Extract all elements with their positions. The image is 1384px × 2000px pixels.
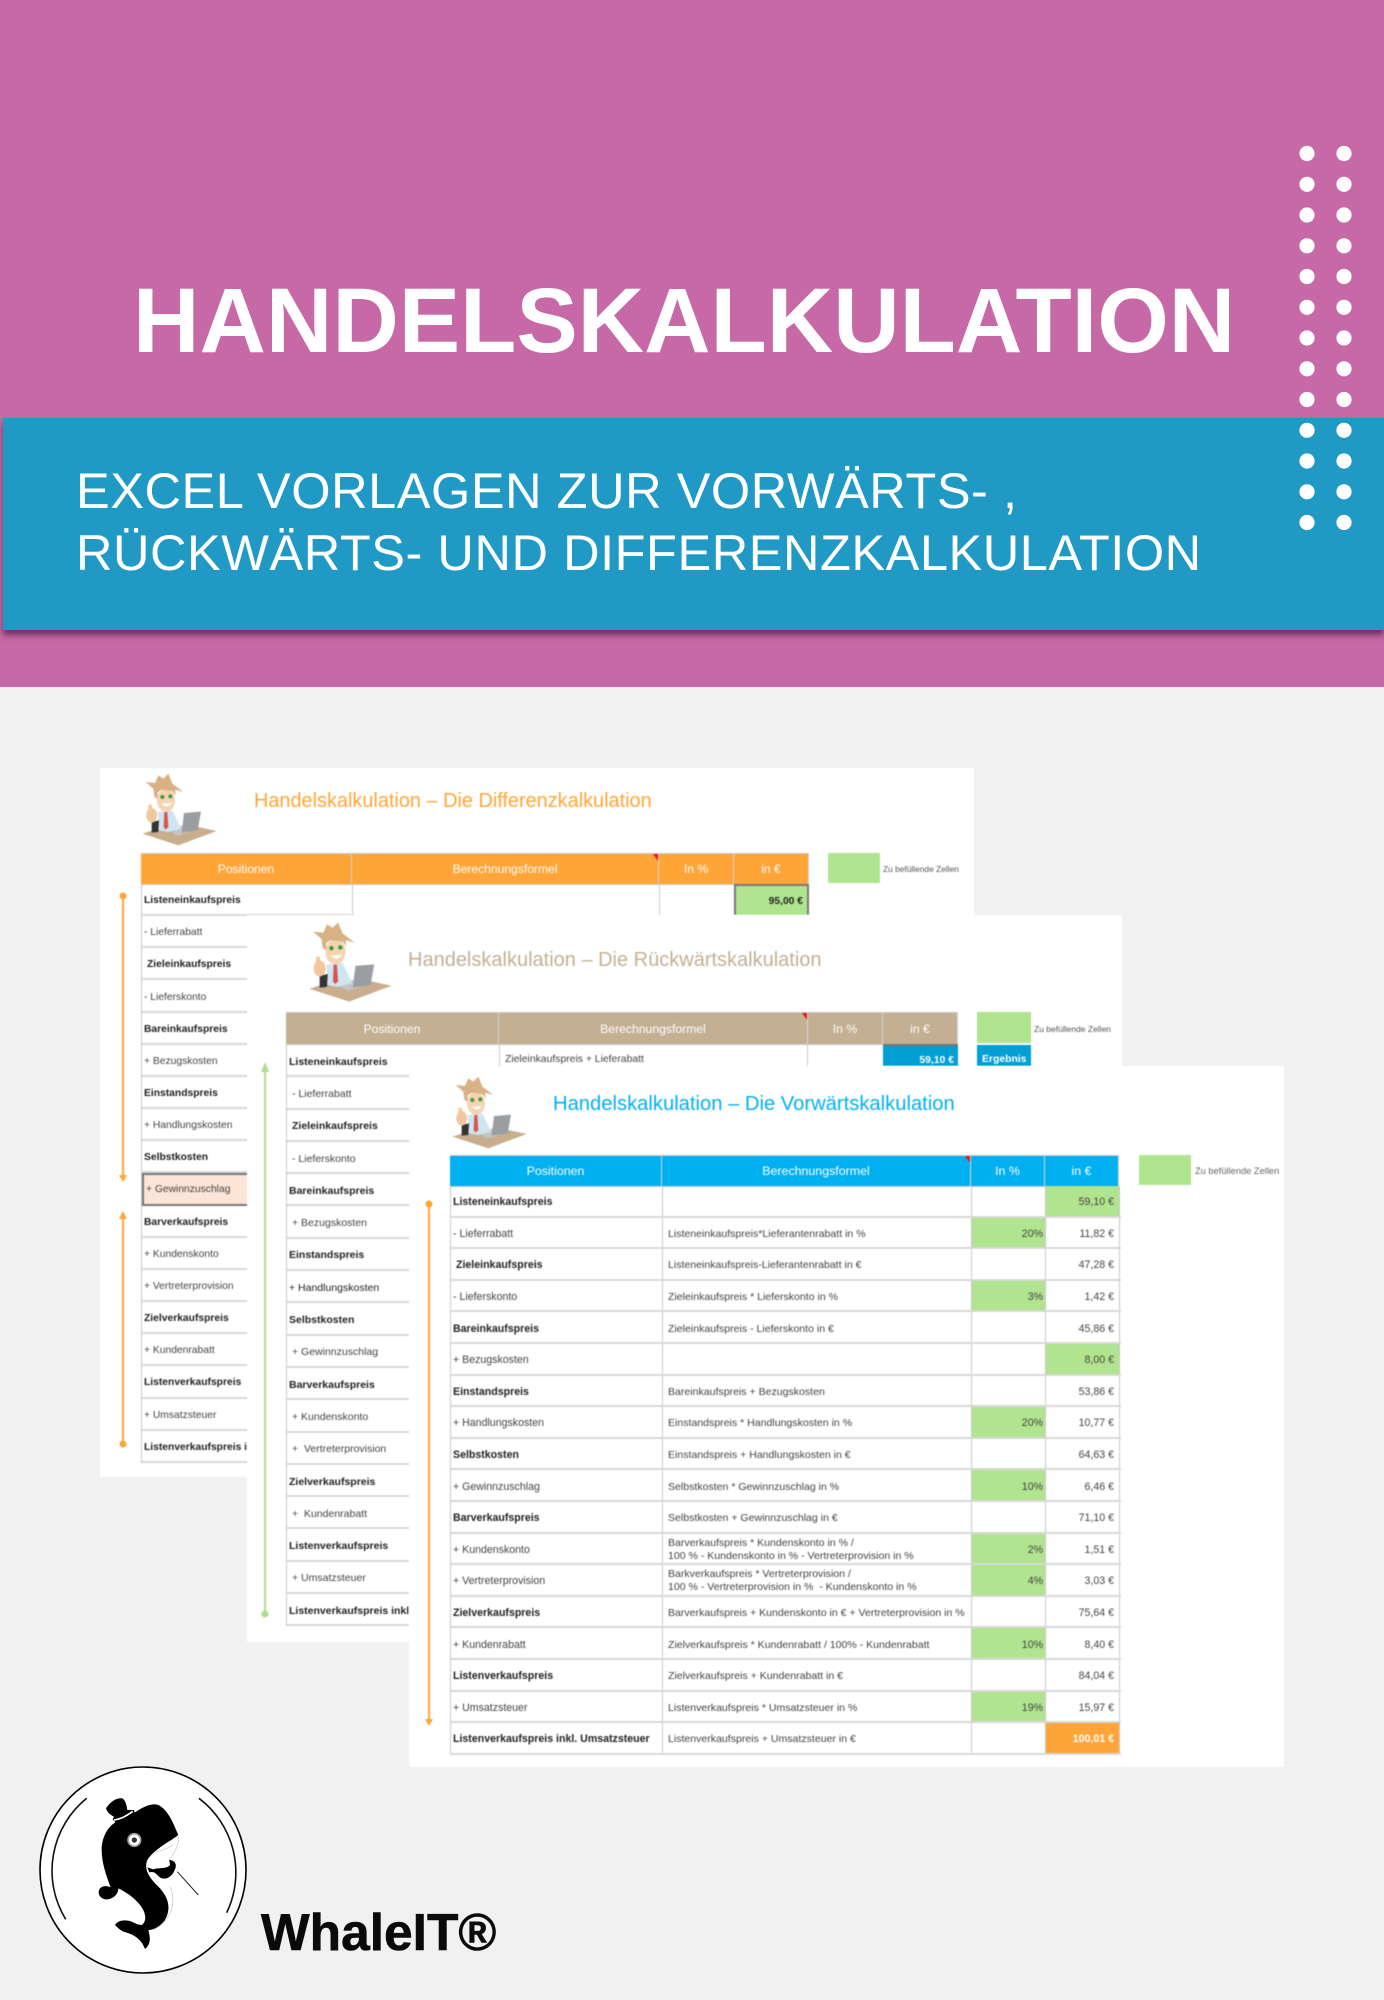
first row formula text	[499, 1045, 808, 1066]
column of position labels: + Handlungskosten	[144, 1120, 232, 1131]
row Bareinkaufspreis: Bareinkaufspreis	[453, 1323, 539, 1335]
column of position labels: Einstandspreis	[289, 1249, 364, 1261]
arrow: orange up	[118, 1210, 128, 1448]
row Bareinkaufspreis: Zieleinkaufspreis - Lieferskonto in €	[668, 1323, 834, 1335]
column of position labels: + Vertreterprovision	[292, 1443, 386, 1455]
row Lieferskonto: 3%	[1028, 1291, 1043, 1303]
row Umsatzsteuer: Listenverkaufspreis * Umsatzsteuer in %	[668, 1702, 857, 1714]
row Einstandspreis	[451, 1376, 1121, 1407]
column of position labels: + Kundenrabatt	[144, 1345, 215, 1356]
legend label: Zu befüllende Zellen	[883, 864, 959, 874]
column of position labels: Bareinkaufspreis	[289, 1185, 374, 1197]
row Gewinnzuschlag: + Gewinnzuschlag	[453, 1481, 540, 1493]
panel: Rückwärtskalkulation	[247, 915, 1122, 1642]
column of position labels	[286, 1045, 501, 1626]
first row formula column line	[659, 884, 660, 915]
row Zieleinkaufspreis	[451, 1249, 1121, 1281]
column of position labels: Bareinkaufspreis	[144, 1024, 228, 1035]
row Umsatzsteuer	[451, 1692, 1121, 1723]
row Vertreterprovision: 3,03 €	[1085, 1575, 1114, 1587]
column of position labels: + Kundenrabatt	[292, 1508, 367, 1520]
row Listenverkaufspreis	[451, 1660, 1121, 1692]
row Listeneinkaufspreis: 59,10 €	[1079, 1196, 1114, 1208]
row Bareinkaufspreis	[451, 1312, 1121, 1344]
table header	[286, 1012, 958, 1045]
row Zielverkaufspreis	[451, 1597, 1121, 1628]
arrow: orange down	[424, 1200, 434, 1726]
column of position labels: + Gewinnzuschlag	[146, 1184, 230, 1195]
legend: cells to fill	[976, 1011, 1112, 1044]
table header: In %	[684, 862, 708, 876]
legend: cells to fill	[1138, 1154, 1280, 1186]
row Kundenrabatt: Zielverkaufspreis * Kundenrabatt / 100% - Kundenrabatt	[668, 1639, 929, 1651]
row Umsatzsteuer: + Umsatzsteuer	[453, 1702, 527, 1714]
column of position labels: + Bezugskosten	[144, 1056, 218, 1067]
column of position labels: + Umsatzsteuer	[144, 1410, 216, 1421]
row Handlungskosten	[451, 1407, 1121, 1439]
logo: whale in circle	[39, 1766, 247, 1974]
row Selbstkosten: Selbstkosten	[453, 1449, 519, 1461]
row Zielverkaufspreis: Zielverkaufspreis	[453, 1607, 540, 1619]
table header: in €	[910, 1022, 930, 1036]
column of position labels: Listenverkaufspreis	[144, 1377, 241, 1388]
panel: Vorwärtskalkulation	[409, 1066, 1284, 1767]
icon: businessman at laptop	[309, 922, 392, 1002]
column of position labels: + Kundenskonto	[144, 1249, 219, 1260]
table header	[450, 1155, 1119, 1187]
column of position labels: - Lieferskonto	[144, 992, 206, 1003]
row Kundenrabatt	[451, 1628, 1121, 1660]
row Bezugskosten	[451, 1344, 1121, 1376]
column of position labels: Listenverkaufspreis inkl. Umsatzsteuer	[289, 1605, 484, 1617]
column of position labels: Barverkaufspreis	[289, 1379, 375, 1391]
row Kundenskonto	[451, 1534, 1121, 1565]
subtitle text: EXCEL VORLAGEN ZUR VORWÄRTS- ,	[76, 462, 1018, 519]
table header: In %	[995, 1164, 1020, 1178]
column of position labels: + Umsatzsteuer	[292, 1572, 366, 1584]
row Listenverkaufspreis inkl. Umsatzsteuer	[451, 1723, 1121, 1755]
row Handlungskosten: 10,77 €	[1079, 1417, 1114, 1429]
row Lieferskonto: 1,42 €	[1085, 1291, 1114, 1303]
row Listenverkaufspreis inkl. Umsatzsteuer: Listenverkaufspreis inkl. Umsatzsteuer	[453, 1733, 650, 1745]
icon: businessman at laptop	[452, 1076, 526, 1149]
heading: Vorwärtskalkulation: Handelskalkulation – Die Vorwärtskalkulation	[553, 1093, 955, 1115]
row Selbstkosten: Einstandspreis + Handlungskosten in €	[668, 1449, 851, 1461]
legend: cells to fill	[827, 852, 960, 884]
row Barverkaufspreis: Selbstkosten + Gewinnzuschlag in €	[668, 1512, 838, 1524]
column of position labels: Zieleinkaufspreis	[292, 1120, 378, 1132]
row Lieferrabatt	[451, 1218, 1121, 1249]
subtitle text	[76, 462, 1202, 580]
column of position labels: + Kundenskonto	[292, 1411, 368, 1423]
row Vertreterprovision	[451, 1565, 1121, 1597]
table header: Berechnungsformel	[453, 862, 557, 876]
row Kundenskonto: 1,51 €	[1085, 1544, 1114, 1556]
row Kundenrabatt: 10%	[1022, 1639, 1043, 1651]
row Vertreterprovision: 100 % - Vertreterprovision in % - Kundenskonto in %	[668, 1581, 917, 1593]
row Handlungskosten: Einstandspreis * Handlungskosten in %	[668, 1417, 852, 1429]
row Listenverkaufspreis inkl. Umsatzsteuer: 100,01 €	[1073, 1733, 1114, 1745]
row Kundenskonto: + Kundenskonto	[453, 1544, 530, 1556]
table header: Positionen	[218, 862, 274, 876]
table header: Positionen	[527, 1164, 584, 1178]
table header: Berechnungsformel	[762, 1164, 870, 1178]
column of position labels: Zieleinkaufspreis	[147, 959, 231, 970]
row Kundenskonto: 100 % - Kundenskonto in % - Vertreterprovision in %	[668, 1550, 914, 1562]
row Listeneinkaufspreis	[451, 1186, 1121, 1218]
subtitle text: RÜCKWÄRTS- UND DIFFERENZKALKULATION	[76, 524, 1202, 580]
row Zielverkaufspreis: Barverkaufspreis + Kundenskonto in € + Vertreterprovision in %	[668, 1607, 965, 1619]
row Lieferrabatt: 20%	[1022, 1228, 1043, 1240]
title: HANDELSKALKULATION	[133, 270, 1235, 372]
column of position labels: - Lieferrabatt	[144, 927, 202, 938]
legend label: Zu befüllende Zellen	[1034, 1024, 1111, 1034]
row Barverkaufspreis: Barverkaufspreis	[453, 1512, 540, 1524]
row Vertreterprovision: + Vertreterprovision	[453, 1575, 545, 1587]
column of position labels: + Vertreterprovision	[144, 1281, 234, 1292]
column of position labels: + Bezugskosten	[292, 1217, 367, 1229]
row Selbstkosten: 64,63 €	[1079, 1449, 1114, 1461]
column of position labels: - Lieferrabatt	[292, 1088, 352, 1100]
heading: Rückwärtskalkulation: Handelskalkulation – Die Rückwärtskalkulation	[408, 949, 822, 971]
purple header background	[0, 0, 1384, 687]
brand name: WhaleIT®	[261, 1903, 496, 1961]
table header: in €	[761, 862, 781, 876]
column of position labels: + Handlungskosten	[289, 1282, 379, 1294]
legend swatch	[977, 1012, 1031, 1043]
row Zielverkaufspreis: 75,64 €	[1079, 1607, 1114, 1619]
row Gewinnzuschlag	[451, 1470, 1121, 1502]
row Listenverkaufspreis inkl. Umsatzsteuer: Listenverkaufspreis + Umsatzsteuer in €	[668, 1733, 856, 1745]
row Lieferskonto: Zieleinkaufspreis * Lieferskonto in %	[668, 1291, 838, 1303]
subtitle band	[3, 418, 1384, 630]
table header: Positionen	[364, 1022, 420, 1036]
panel: Differenzkalkulation	[100, 768, 974, 1477]
result label Ergebnis	[977, 1045, 1031, 1066]
column of position labels: Selbstkosten	[144, 1152, 208, 1163]
column of position labels: Selbstkosten	[289, 1314, 354, 1326]
row Handlungskosten: + Handlungskosten	[453, 1417, 544, 1429]
row Umsatzsteuer: 19%	[1022, 1702, 1043, 1714]
row Listeneinkaufspreis: Listeneinkaufspreis	[453, 1196, 552, 1208]
row Bezugskosten: 8,00 €	[1085, 1354, 1114, 1366]
row Gewinnzuschlag: 6,46 €	[1085, 1481, 1114, 1493]
row Lieferrabatt: 11,82 €	[1079, 1228, 1114, 1240]
column of position labels: Zielverkaufspreis	[289, 1476, 375, 1488]
row Bareinkaufspreis: 45,86 €	[1079, 1323, 1114, 1335]
row Barverkaufspreis: 71,10 €	[1079, 1512, 1114, 1524]
input cell 95,00 €	[734, 884, 809, 915]
calculation table rows	[450, 1186, 1121, 1755]
row Barverkaufspreis	[451, 1502, 1121, 1534]
arrow: orange down	[118, 892, 128, 1182]
row Einstandspreis: Bareinkaufspreis + Bezugskosten	[668, 1386, 825, 1398]
row Selbstkosten	[451, 1439, 1121, 1470]
column of position labels	[141, 884, 354, 1463]
icon: businessman at laptop	[142, 773, 216, 846]
row Lieferskonto	[451, 1281, 1121, 1312]
row Zieleinkaufspreis: 47,28 €	[1079, 1259, 1114, 1271]
row Kundenskonto: Barverkaufspreis * Kundenskonto in % /	[668, 1537, 854, 1549]
column of position labels: + Gewinnzuschlag	[292, 1346, 378, 1358]
decorative dot columns	[1299, 146, 1352, 530]
table header: in €	[1072, 1164, 1091, 1178]
column of position labels: Listenverkaufspreis inkl. Umsatzsteuer	[144, 1442, 335, 1453]
row Gewinnzuschlag: Selbstkosten * Gewinnzuschlag in %	[668, 1481, 839, 1493]
row Einstandspreis: 53,86 €	[1079, 1386, 1114, 1398]
arrow: green up	[260, 1062, 270, 1618]
column of position labels: Einstandspreis	[144, 1088, 218, 1099]
result cell 59,10 €	[883, 1044, 958, 1066]
row Kundenrabatt: 8,40 €	[1085, 1639, 1114, 1651]
legend swatch	[828, 853, 880, 883]
input cell 95,00 €: 95,00 €	[769, 896, 803, 907]
column of position labels: Listeneinkaufspreis	[289, 1056, 388, 1068]
legend label: Zu befüllende Zellen	[1195, 1166, 1279, 1176]
row Listenverkaufspreis: 84,04 €	[1079, 1670, 1114, 1682]
table header	[141, 853, 809, 885]
row Kundenskonto: 2%	[1028, 1544, 1043, 1556]
row Vertreterprovision: Barkverkaufspreis * Vertreterprovision /	[668, 1568, 851, 1580]
first row formula text: Zieleinkaufspreis + Lieferabatt	[505, 1054, 644, 1065]
column of position labels: Barverkaufspreis	[144, 1217, 228, 1228]
column of position labels: Listenverkaufspreis	[289, 1540, 388, 1552]
table header: In %	[833, 1022, 857, 1036]
row Kundenrabatt: + Kundenrabatt	[453, 1639, 526, 1651]
result label Ergebnis: Ergebnis	[982, 1054, 1026, 1065]
row Vertreterprovision: 4%	[1028, 1575, 1043, 1587]
row Gewinnzuschlag: 10%	[1022, 1481, 1043, 1493]
row Einstandspreis: Einstandspreis	[453, 1386, 529, 1398]
legend swatch	[1139, 1155, 1191, 1185]
row Lieferskonto: - Lieferskonto	[453, 1291, 517, 1303]
row Lieferrabatt: Listeneinkaufspreis*Lieferantenrabatt in %	[668, 1228, 866, 1240]
row Bezugskosten: + Bezugskosten	[453, 1354, 529, 1366]
row Zieleinkaufspreis: Listeneinkaufspreis-Lieferantenrabatt in €	[668, 1259, 861, 1271]
column of position labels: Zielverkaufspreis	[144, 1313, 229, 1324]
row Listenverkaufspreis: Zielverkaufspreis + Kundenrabatt in €	[668, 1670, 843, 1682]
row Lieferrabatt: - Lieferrabatt	[453, 1228, 513, 1240]
row Listenverkaufspreis: Listenverkaufspreis	[453, 1670, 553, 1682]
column of position labels: - Lieferskonto	[292, 1153, 356, 1165]
column of position labels: Listeneinkaufspreis	[144, 895, 241, 906]
table header: Berechnungsformel	[600, 1022, 706, 1036]
result cell 59,10 €: 59,10 €	[919, 1055, 954, 1066]
row Umsatzsteuer: 15,97 €	[1079, 1702, 1114, 1714]
row Handlungskosten: 20%	[1022, 1417, 1043, 1429]
heading: Differenzkalkulation: Handelskalkulation – Die Differenzkalkulation	[254, 790, 652, 812]
row Zieleinkaufspreis: Zieleinkaufspreis	[456, 1259, 543, 1271]
